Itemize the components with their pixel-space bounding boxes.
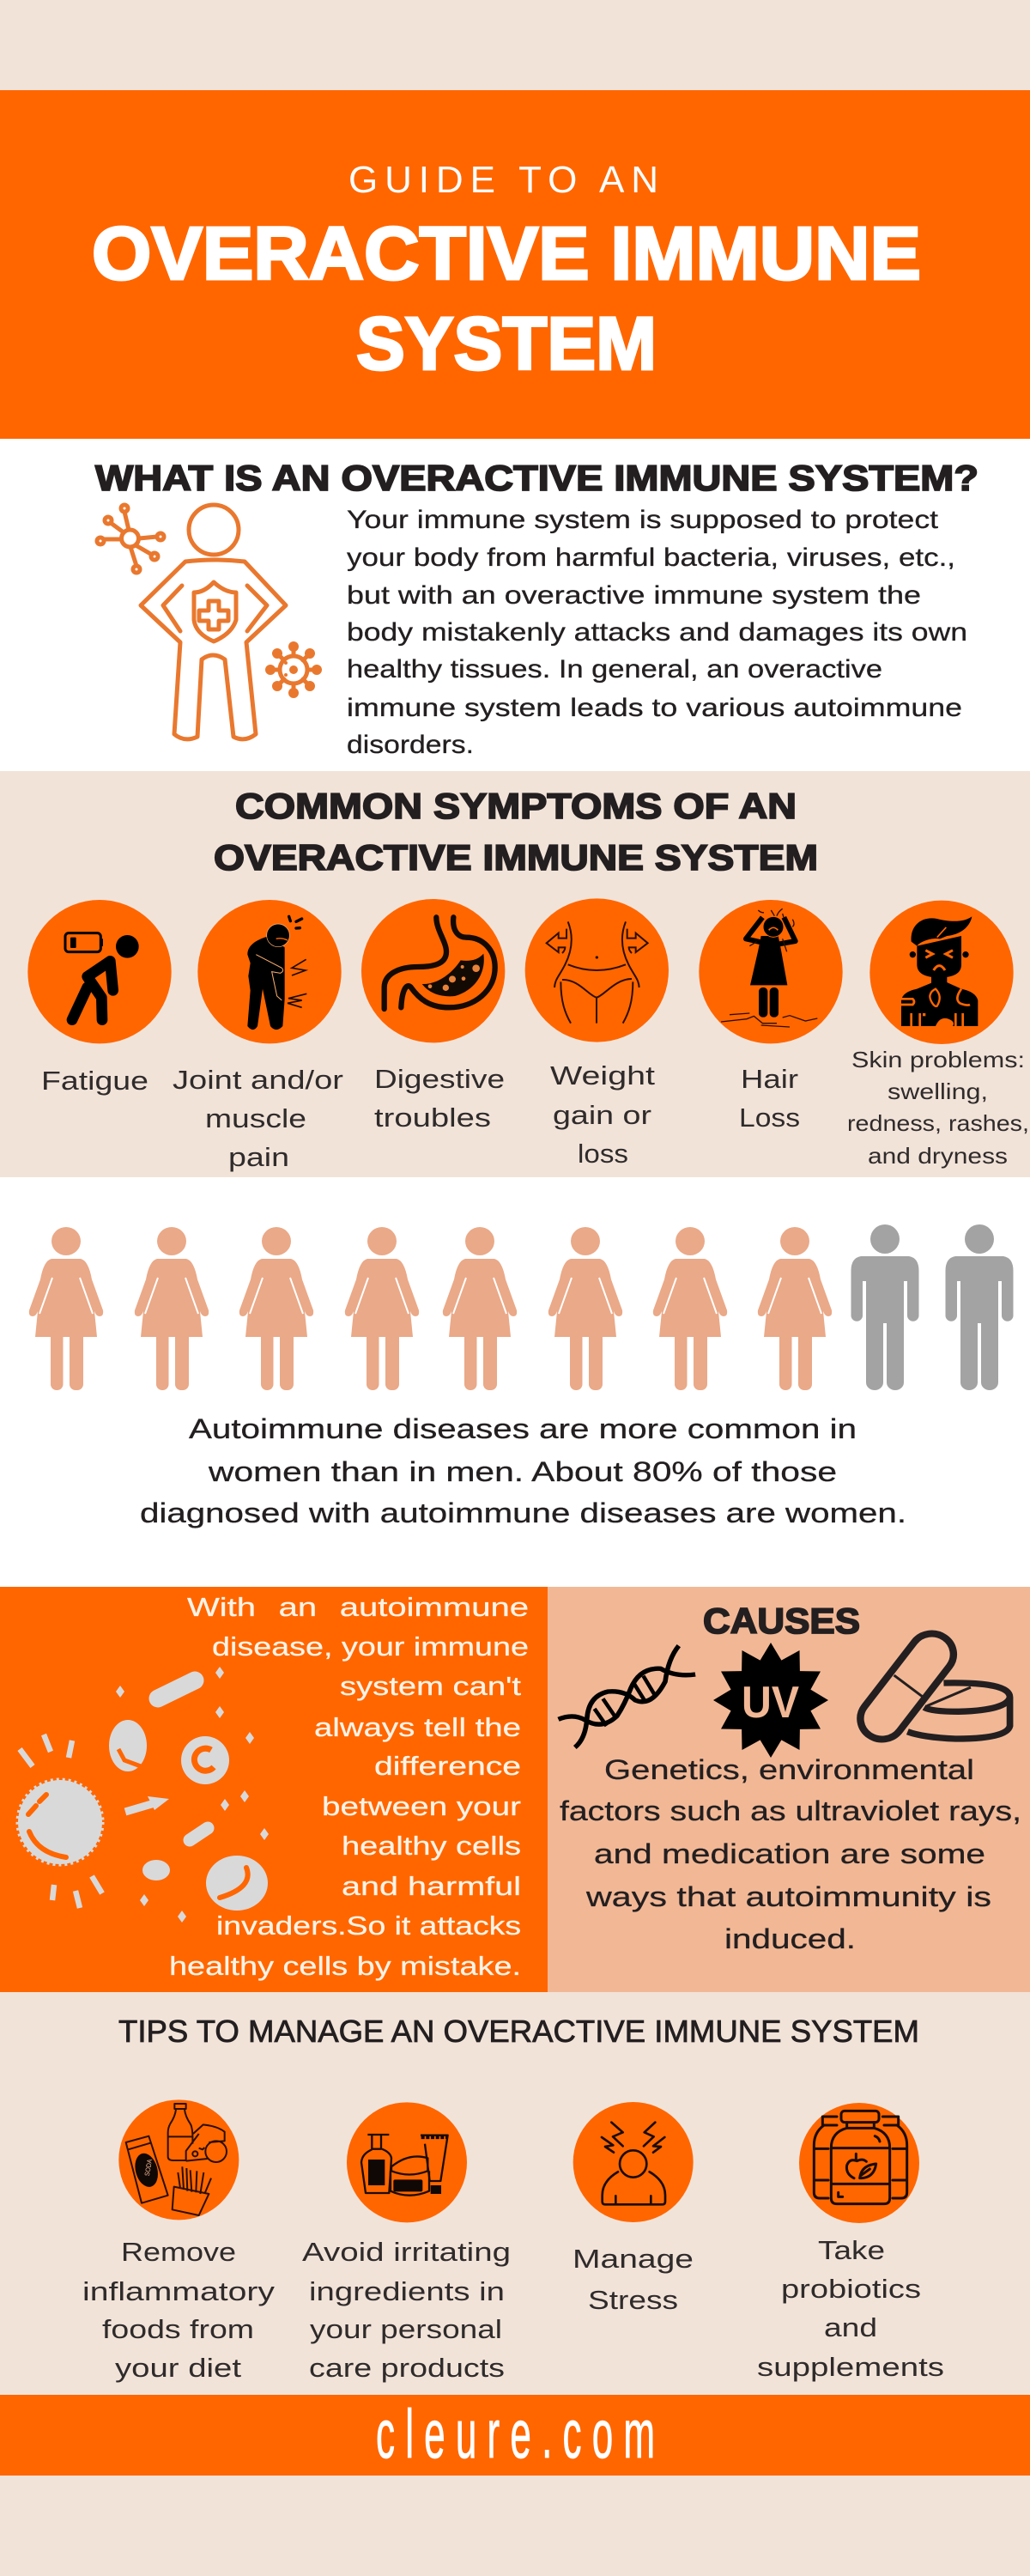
tip labels: Remove bbox=[121, 2237, 236, 2267]
panel: common symptoms bbox=[0, 771, 1030, 1177]
icon: supplements bbox=[799, 2103, 919, 2223]
tip labels: Stress bbox=[588, 2285, 678, 2315]
explanation text: healthy cells bbox=[342, 1831, 521, 1861]
explanation text: invaders.So it attacks bbox=[216, 1911, 521, 1941]
symptom labels: Skin problems: bbox=[851, 1047, 1025, 1072]
heading: WHAT IS AN OVERACTIVE IMMUNE SYSTEM? bbox=[95, 458, 978, 498]
causes text: and medication are some bbox=[594, 1838, 985, 1869]
tip labels: inflammatory bbox=[82, 2276, 276, 2306]
symptom labels: Joint and/or bbox=[173, 1065, 343, 1095]
text block: disorders. bbox=[347, 731, 474, 759]
tip labels: and bbox=[824, 2312, 877, 2342]
icon: dna bbox=[559, 1646, 695, 1747]
tip labels: Avoid irritating bbox=[302, 2237, 511, 2267]
causes text bbox=[560, 1754, 1021, 1954]
explanation text: With an autoimmune bbox=[187, 1592, 529, 1622]
text block: body mistakenly attacks and damages its own bbox=[347, 618, 967, 647]
icon: digestive bbox=[361, 899, 505, 1042]
symptom labels: pain bbox=[228, 1142, 289, 1172]
icon: joint pain bbox=[197, 900, 342, 1043]
symptom labels: Weight bbox=[550, 1060, 655, 1091]
icon: personal care bbox=[347, 2102, 467, 2222]
symptom labels: muscle bbox=[205, 1103, 306, 1133]
title bbox=[92, 159, 921, 386]
explanation text bbox=[169, 1592, 529, 1981]
explanation text: and harmful bbox=[342, 1871, 521, 1901]
causes text: Genetics, environmental bbox=[604, 1754, 974, 1785]
symptom labels: Fatigue bbox=[41, 1066, 148, 1096]
symptom labels: gain or bbox=[553, 1100, 651, 1130]
icon: uv sun bbox=[713, 1643, 828, 1758]
pictogram: men bbox=[851, 1224, 1013, 1390]
causes text: ways that autoimmunity is bbox=[585, 1881, 991, 1912]
panel: autoimmune explanation bbox=[0, 1587, 548, 1992]
heading: OVERACTIVE IMMUNE SYSTEM bbox=[214, 837, 818, 878]
heading: TIPS TO MANAGE AN OVERACTIVE IMMUNE SYSTEM bbox=[118, 2014, 919, 2049]
symptom labels: Loss bbox=[739, 1103, 800, 1133]
text block bbox=[347, 506, 967, 759]
statistic text: Autoimmune diseases are more common in bbox=[189, 1413, 857, 1444]
icon: person with shield bbox=[97, 505, 322, 739]
panel: tips bbox=[0, 1992, 1030, 2395]
explanation text: between your bbox=[322, 1791, 521, 1821]
statistic text: women than in men. About 80% of those bbox=[208, 1456, 837, 1487]
tip labels: your diet bbox=[115, 2353, 241, 2383]
explanation text: system can't bbox=[340, 1671, 521, 1701]
statistic text: diagnosed with autoimmune diseases are women. bbox=[140, 1498, 906, 1528]
statistic text bbox=[140, 1413, 906, 1528]
panel: what is an overactive immune system bbox=[0, 439, 1030, 771]
heading: CAUSES bbox=[703, 1601, 860, 1641]
tip labels: your personal bbox=[310, 2314, 502, 2344]
website: cleure.com bbox=[376, 2396, 655, 2472]
title: GUIDE TO AN bbox=[348, 159, 658, 201]
text block: healthy tissues. In general, an overactive bbox=[347, 655, 882, 683]
icon: immune cell attacking bbox=[17, 1667, 269, 1923]
icon: hair loss bbox=[699, 900, 843, 1043]
symptom labels: Digestive bbox=[374, 1064, 505, 1094]
causes text: factors such as ultraviolet rays, bbox=[560, 1795, 1021, 1826]
tip labels: ingredients in bbox=[309, 2276, 505, 2306]
text block: immune system leads to various autoimmune bbox=[347, 694, 962, 722]
panel: causes bbox=[548, 1587, 1030, 1992]
symptom labels: Hair bbox=[741, 1064, 798, 1094]
icon: skin problems bbox=[869, 901, 1014, 1044]
icon: stress bbox=[573, 2102, 694, 2222]
explanation text: healthy cells by mistake. bbox=[169, 1951, 521, 1981]
title: OVERACTIVE IMMUNE bbox=[92, 212, 921, 295]
symptom labels: swelling, bbox=[888, 1078, 988, 1104]
icon: foods bbox=[118, 2099, 239, 2220]
symptom labels: and dryness bbox=[868, 1143, 1008, 1169]
heading: COMMON SYMPTOMS OF AN bbox=[235, 786, 797, 826]
symptom labels: loss bbox=[578, 1139, 628, 1169]
explanation text: difference bbox=[374, 1751, 521, 1781]
pictogram: women bbox=[29, 1227, 832, 1390]
title: SYSTEM bbox=[356, 302, 657, 386]
icon: uv sun: UV bbox=[742, 1678, 799, 1728]
causes text: induced. bbox=[724, 1923, 856, 1954]
tip labels: probiotics bbox=[781, 2274, 921, 2304]
tip labels bbox=[82, 2235, 944, 2383]
icon: weight bbox=[525, 898, 669, 1042]
tip labels: Manage bbox=[573, 2244, 694, 2274]
symptom labels: troubles bbox=[374, 1103, 491, 1133]
tip labels: supplements bbox=[757, 2352, 944, 2382]
header banner bbox=[0, 90, 1030, 439]
tip labels: Take bbox=[818, 2235, 885, 2265]
icon: fatigue bbox=[27, 900, 172, 1043]
icon: pills bbox=[851, 1625, 1010, 1747]
explanation text: always tell the bbox=[314, 1712, 521, 1742]
footer banner bbox=[0, 2395, 1030, 2476]
icon: foods: SODA bbox=[143, 2158, 154, 2177]
heading bbox=[214, 786, 818, 878]
text block: Your immune system is supposed to protect bbox=[347, 506, 939, 534]
text block: your body from harmful bacteria, viruses, etc., bbox=[347, 544, 955, 572]
tip labels: foods from bbox=[102, 2314, 254, 2344]
explanation text: disease, your immune bbox=[212, 1631, 529, 1662]
symptom labels bbox=[41, 1047, 1029, 1172]
text block: but with an overactive immune system the bbox=[347, 581, 921, 610]
panel: women vs men bbox=[0, 1177, 1030, 1587]
tip labels: care products bbox=[309, 2353, 505, 2383]
symptom labels: redness, rashes, bbox=[847, 1110, 1029, 1136]
